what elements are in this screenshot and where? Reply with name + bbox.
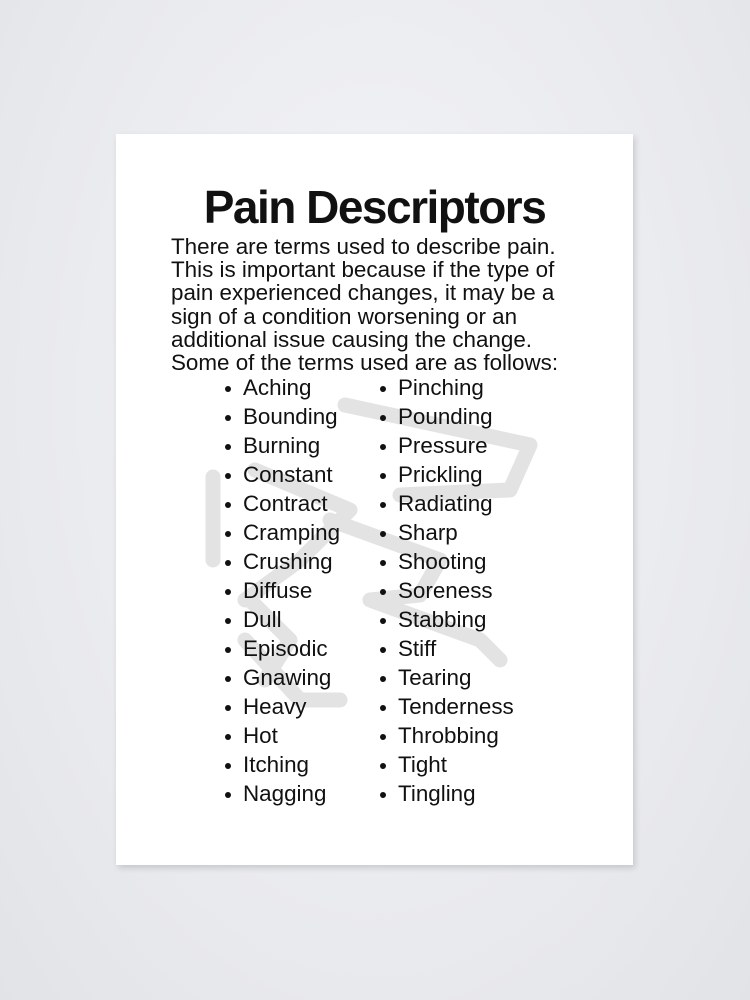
list column 1 <box>225 375 340 806</box>
list column 2: Tenderness <box>398 694 514 719</box>
list column 1: Aching <box>243 375 311 400</box>
list column 2: Prickling <box>398 462 483 487</box>
list column 2: Tight <box>398 752 447 777</box>
list column 2: Stabbing <box>398 607 486 632</box>
list column 1: Constant <box>243 462 333 487</box>
title: Pain Descriptors <box>204 181 545 233</box>
list column 2: Tearing <box>398 665 471 690</box>
list column 2: Sharp <box>398 520 458 545</box>
list column 1: Bounding <box>243 404 338 429</box>
list column 1: Dull <box>243 607 282 632</box>
list column 2 <box>380 375 514 806</box>
list column 2: Pinching <box>398 375 484 400</box>
list column 2: Stiff <box>398 636 436 661</box>
list column 1: Hot <box>243 723 278 748</box>
list column 1: Nagging <box>243 781 326 806</box>
list column 1: Diffuse <box>243 578 312 603</box>
poster sheet <box>116 134 633 865</box>
list column 2: Pressure <box>398 433 488 458</box>
intro text: There are terms used to describe pain. This is important because if the type of pain experienced changes, it may be a sign of a condition worsening or an additional issue causing the change. Some of the terms used are as follows: <box>171 234 558 375</box>
list column 1: Burning <box>243 433 320 458</box>
list column 2: Radiating <box>398 491 493 516</box>
list column 1: Gnawing <box>243 665 331 690</box>
list column 1: Episodic <box>243 636 328 661</box>
list column 2: Soreness <box>398 578 493 603</box>
list column 1: Crushing <box>243 549 333 574</box>
watermark figure <box>206 398 538 708</box>
list column 1: Heavy <box>243 694 306 719</box>
list column 2: Pounding <box>398 404 493 429</box>
list column 2: Throbbing <box>398 723 499 748</box>
list column 1: Contract <box>243 491 328 516</box>
list column 1: Itching <box>243 752 309 777</box>
list column 2: Tingling <box>398 781 476 806</box>
list column 2: Shooting <box>398 549 486 574</box>
list column 1: Cramping <box>243 520 340 545</box>
